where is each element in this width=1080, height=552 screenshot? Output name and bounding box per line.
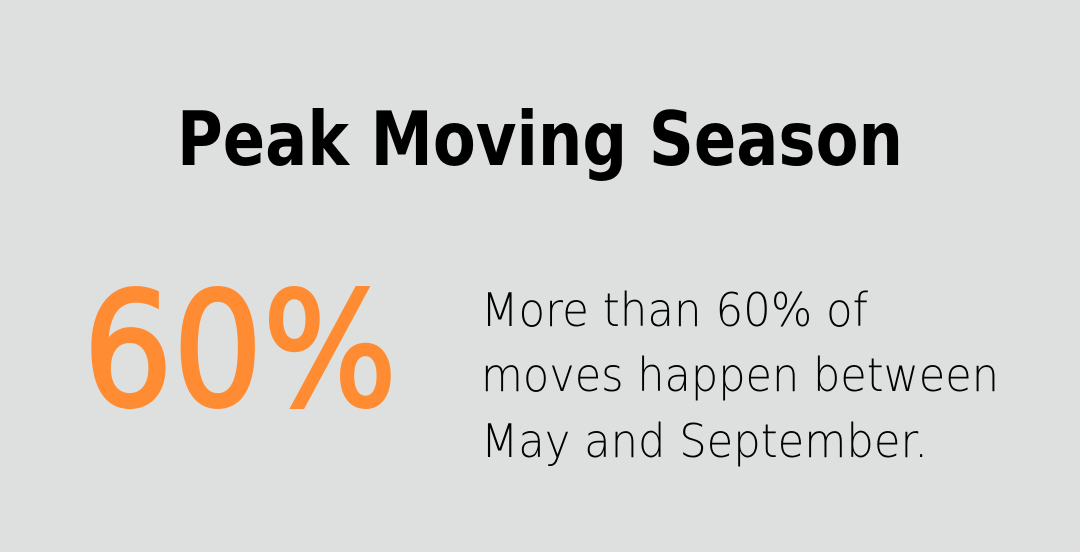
description text: More than 60% of	[481, 283, 869, 337]
title: Peak Moving Season	[177, 95, 903, 183]
description text: May and September.	[481, 414, 928, 468]
big statistic: 60%: 60%	[83, 259, 397, 443]
description text	[481, 283, 999, 468]
description text: moves happen between	[481, 348, 999, 402]
